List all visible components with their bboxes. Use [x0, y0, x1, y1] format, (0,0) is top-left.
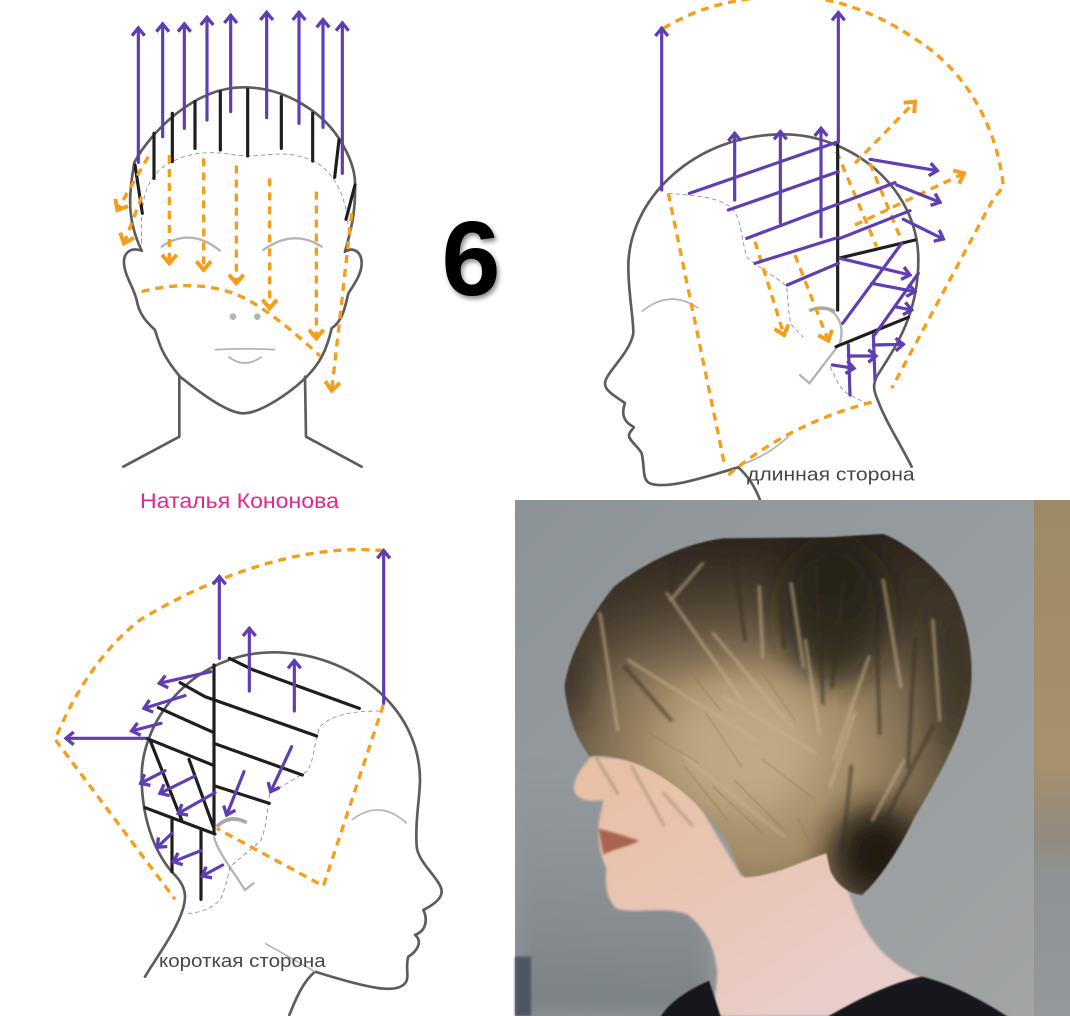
number 6: 6: [442, 200, 500, 318]
panel: short side profile diagram: [55, 550, 442, 1015]
panel: long side profile diagram: [605, 0, 1003, 500]
front head: purple upward arrows: [138, 12, 342, 173]
long side: purple section lines: [689, 142, 918, 395]
front head: thin dashed section line: [141, 153, 348, 243]
front head: orange dashed downward arrows: [117, 155, 352, 391]
photo: dark object bottom left: [515, 957, 531, 1016]
long side: orange dashed guide lines: [663, 0, 1003, 475]
short side: thin dashed section line: [187, 711, 380, 913]
front head: black partings: [135, 89, 355, 219]
photo: hair fringe over face: [596, 758, 692, 825]
front head: hair outline: [130, 87, 355, 252]
short side: head outline: [142, 652, 442, 1015]
front face: nose dots: [230, 313, 261, 320]
long side: thin dashed section line: [668, 193, 870, 405]
long side: purple outward arrows: [832, 159, 943, 368]
long side: head outline: [605, 134, 918, 500]
long side: eyebrow and jaw: [642, 299, 788, 465]
short side: orange dashed guide lines: [55, 550, 383, 899]
photo: hair mass: [557, 530, 979, 900]
panel: photo of finished haircut: [515, 500, 1070, 1016]
long side: black partings: [836, 143, 915, 347]
short side: black partings: [145, 658, 359, 899]
front face: mouth: [215, 349, 275, 363]
long side: purple upward arrows: [662, 13, 838, 237]
short side label: короткая сторона: [159, 950, 326, 971]
short side: eyebrow and jaw: [265, 810, 407, 972]
author name: Наталья Кононова: [140, 490, 339, 513]
photo: face and neck: [574, 757, 1007, 1016]
short side: purple upward arrows: [219, 551, 384, 711]
photo: adjacent frame strip: [1034, 500, 1070, 1016]
photo: wall background: [515, 500, 1034, 1016]
panel: front view diagram: [117, 12, 362, 467]
long side: ear: [800, 308, 841, 383]
photo: lips: [599, 828, 639, 855]
front head: neck and shoulders: [123, 377, 362, 467]
short side: purple outward arrows: [66, 672, 292, 876]
front head: face and ears outline: [124, 249, 362, 413]
short side: ear: [214, 819, 253, 890]
front face: eyebrows: [162, 238, 322, 251]
front head: orange dashed perimeter curve: [142, 286, 320, 356]
long side: orange dashed arrows: [755, 102, 964, 341]
long side label: длинная сторона: [747, 463, 915, 484]
photo: black sweater: [660, 977, 1009, 1016]
